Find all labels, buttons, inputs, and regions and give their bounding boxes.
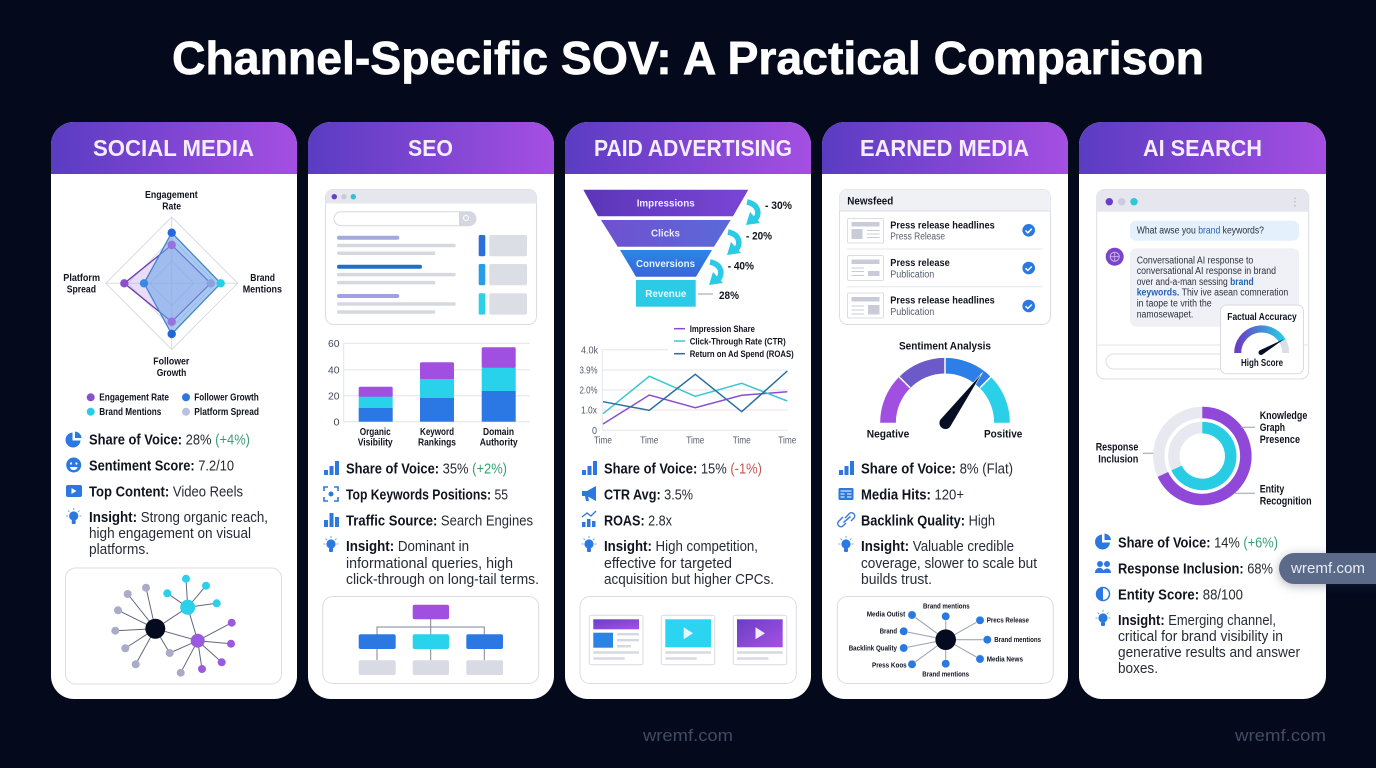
stats: ai search: generative results and answer [1118, 645, 1300, 661]
line chart: Time [594, 435, 612, 446]
factual accuracy card: Factual Accuracy [1227, 312, 1297, 323]
factual accuracy card [1220, 305, 1304, 374]
ai chat mockup: namosewapet. [1137, 309, 1193, 320]
stats: social media: platforms. [89, 542, 149, 558]
stats: ai search: Share of Voice: 14% (+6%) [1118, 536, 1278, 552]
sentiment gauge: Positive [984, 428, 1022, 440]
ai chat mockup: conversational AI response in brand [1137, 266, 1276, 277]
title: Channel-Specific SOV: A Practical Comparison [172, 32, 1204, 84]
radar chart: Spread [67, 285, 96, 296]
newsfeed mockup: Press release headlines [890, 220, 995, 231]
funnel chart: - 20% [746, 230, 772, 242]
stats: paid advertising: CTR Avg: 3.5% [604, 488, 693, 504]
radar legend: Brand Mentions [99, 407, 162, 418]
radar chart: Growth [157, 368, 186, 379]
header: ai search: AI SEARCH [1143, 135, 1262, 161]
stacked bar chart: 20 [328, 391, 340, 402]
watermark pill [1279, 553, 1376, 584]
stats: ai search: critical for brand visibility in [1118, 629, 1283, 645]
funnel chart: 28% [719, 290, 739, 302]
line chart: Time [778, 435, 797, 446]
stats: seo: Traffic Source: Search Engines [346, 514, 533, 530]
radar chart: Mentions [243, 285, 282, 296]
stats: paid advertising [582, 461, 774, 588]
funnel chart: Conversions [636, 259, 695, 270]
donut chart: Knowledge [1260, 410, 1307, 422]
media network diagram: Brand mentions [922, 669, 969, 678]
newsfeed mockup: Publication [890, 307, 934, 318]
header: ai search [1079, 122, 1326, 174]
media network diagram [837, 596, 1053, 684]
stats: earned media [838, 461, 1037, 588]
donut chart [1096, 410, 1312, 508]
stats: seo: click-through on long-tail terms. [346, 572, 539, 588]
line chart: Impression Share [690, 324, 755, 335]
stats: social media: Share of Voice: 28% (+4%) [89, 432, 250, 448]
stats: ai search: Entity Score: 88/100 [1118, 588, 1243, 604]
newsfeed mockup: Press Release [890, 231, 945, 242]
newsfeed mockup: Press release [890, 258, 950, 269]
radar legend [87, 393, 259, 418]
stats: earned media: builds trust. [861, 572, 932, 588]
media network diagram: Media Outist [867, 610, 906, 619]
line chart [580, 324, 797, 446]
stats: earned media: Insight: Valuable credible [861, 539, 1014, 555]
stats: paid advertising: Share of Voice: 15% (-1%) [604, 462, 762, 478]
newsfeed mockup: Newsfeed [847, 195, 893, 207]
watermark center: wremf.com [642, 726, 733, 745]
header: paid advertising: PAID ADVERTISING [594, 135, 792, 161]
line chart: Time [686, 435, 705, 446]
radar chart: Brand [250, 273, 275, 284]
header: social media: SOCIAL MEDIA [93, 135, 254, 161]
stacked bar chart: 40 [328, 365, 340, 376]
stacked bar chart: Authority [480, 438, 518, 449]
stats: earned media: Media Hits: 120+ [861, 488, 964, 504]
radar chart: Follower [153, 356, 189, 367]
stats: paid advertising: effective for targeted [604, 556, 732, 572]
ai chat mockup [1097, 190, 1309, 379]
stats: social media: high engagement on visual [89, 526, 251, 542]
line chart: Time [640, 435, 659, 446]
header: earned media [822, 122, 1068, 174]
panel: seo [308, 122, 554, 699]
radar chart [63, 190, 282, 379]
media network diagram: Backlink Quality [849, 643, 898, 652]
funnel chart: Impressions [637, 198, 695, 210]
media network diagram: Brand [880, 627, 897, 636]
funnel chart [583, 190, 792, 307]
line chart: Time [733, 435, 751, 446]
donut chart: Response [1096, 442, 1138, 454]
ai chat mockup: in taope te vrith the [1137, 298, 1212, 309]
radar legend: Platform Spread [194, 407, 259, 418]
media network diagram: Press Koos [872, 660, 907, 669]
stats: ai search: Response Inclusion: 68% [1118, 562, 1273, 578]
newsfeed mockup: Press release headlines [890, 296, 995, 307]
watermark right: wremf.com [1234, 726, 1326, 745]
header: earned media: EARNED MEDIA [860, 135, 1029, 161]
stats: social media: Sentiment Score: 7.2/10 [89, 458, 234, 474]
funnel chart: Clicks [651, 228, 680, 240]
donut chart: Graph [1260, 422, 1285, 434]
line chart: Return on Ad Spend (ROAS) [690, 349, 794, 360]
donut chart: Presence [1260, 434, 1300, 446]
header: social media [51, 122, 297, 174]
media network diagram: Brand mentions [923, 601, 970, 610]
site hierarchy diagram [323, 596, 539, 684]
media network diagram: Precs Release [987, 616, 1029, 625]
stats: social media: Insight: Strong organic reach, [89, 510, 268, 526]
stats: seo: Insight: Dominant in [346, 539, 469, 555]
stats: social media [66, 432, 268, 558]
ai chat mockup: Conversational AI response to [1137, 255, 1254, 266]
stats: ai search: Insight: Emerging channel, [1118, 613, 1276, 629]
stats: seo [324, 461, 539, 588]
header: seo [308, 122, 554, 174]
stacked bar chart: Rankings [418, 438, 456, 449]
donut chart: Entity [1260, 484, 1285, 496]
panel: social media [51, 122, 297, 699]
stacked bar chart: 60 [328, 339, 340, 350]
stats: earned media: Share of Voice: 8% (Flat) [861, 462, 1013, 478]
panel: earned media [822, 122, 1068, 699]
sentiment gauge [867, 341, 1022, 440]
newsfeed mockup: Publication [890, 269, 934, 280]
stats: earned media: coverage, slower to scale but [861, 556, 1037, 572]
stats: ai search [1095, 534, 1300, 677]
stats: ai search: boxes. [1118, 661, 1158, 677]
newsfeed mockup [840, 190, 1050, 324]
line chart: 0 [592, 426, 597, 437]
funnel chart: Revenue [645, 289, 687, 300]
stats: paid advertising: Insight: High competition, [604, 539, 758, 555]
radar legend: Engagement Rate [99, 393, 169, 404]
header: seo: SEO [408, 135, 453, 161]
media network diagram: Media News [987, 655, 1023, 664]
factual accuracy card: High Score [1241, 358, 1283, 369]
stacked bar chart: Organic [360, 427, 391, 438]
sentiment gauge: Negative [867, 428, 909, 440]
network diagram: social [66, 568, 282, 684]
stats: seo: Share of Voice: 35% (+2%) [346, 462, 507, 478]
radar chart: Engagement [145, 190, 198, 201]
search results mockup [326, 190, 536, 324]
line chart: 1.0x [581, 406, 597, 416]
radar chart: Platform [63, 273, 100, 284]
sentiment gauge: Sentiment Analysis [899, 341, 991, 353]
line chart: 4.0k [581, 346, 599, 356]
stacked bar chart: 0 [334, 417, 340, 428]
funnel chart: - 40% [728, 260, 754, 272]
stats: seo: informational queries, high [346, 556, 513, 572]
funnel chart: - 30% [765, 200, 792, 212]
stats: social media: Top Content: Video Reels [89, 484, 243, 500]
ai chat mockup: keywords. Thiv ive asean comneration [1137, 288, 1288, 299]
panel: paid advertising [565, 122, 811, 699]
stats: paid advertising: acquisition but higher CPCs. [604, 572, 774, 588]
stacked bar chart: Keyword [420, 427, 454, 438]
panel: ai search [1079, 122, 1326, 699]
stacked bar chart: Visibility [358, 438, 393, 449]
stacked bar chart: Domain [483, 427, 514, 438]
media network diagram: Brand mentions [994, 635, 1041, 644]
ad formats panel [580, 596, 796, 684]
stats: earned media: Backlink Quality: High [861, 514, 995, 530]
line chart: 3.9% [580, 366, 598, 376]
donut chart: Recognition [1260, 496, 1312, 508]
stats: paid advertising: ROAS: 2.8x [604, 514, 673, 530]
radar chart: Rate [162, 202, 181, 213]
radar legend: Follower Growth [194, 393, 259, 404]
stats: seo: Top Keywords Positions: 55 [346, 488, 508, 504]
line chart: 2.0% [580, 386, 598, 396]
line chart: Click-Through Rate (CTR) [690, 336, 786, 347]
ai chat mockup: What awse you brand keywords? [1137, 226, 1264, 237]
ai chat mockup: over and-a-man sessing brand [1137, 277, 1254, 288]
watermark pill: wremf.com [1290, 560, 1365, 577]
stacked bar chart [328, 339, 530, 449]
header: paid advertising [565, 122, 811, 174]
donut chart: Inclusion [1098, 454, 1139, 466]
